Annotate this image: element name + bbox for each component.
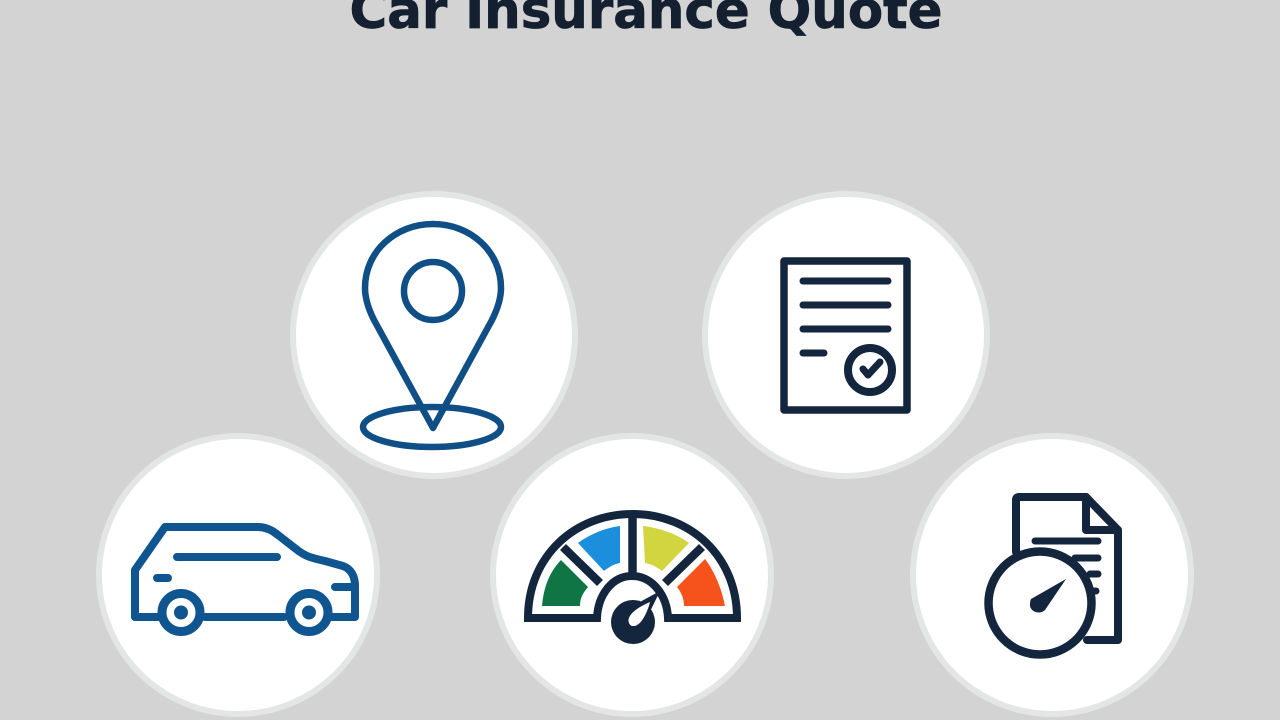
panel: location [293, 194, 575, 476]
icon: car [135, 527, 355, 632]
icon: location pin [363, 224, 501, 447]
panel: car [99, 436, 377, 714]
icon: document with stopwatch [988, 497, 1118, 654]
icon: document with check [784, 261, 907, 410]
icon: credit score gauge [528, 514, 737, 644]
gauge segment: yellow [643, 526, 689, 571]
gauge segment: blue [578, 526, 620, 571]
gauge segment: orange [677, 559, 725, 606]
gauge segment: green [542, 560, 588, 606]
gauge needle [611, 600, 655, 644]
panel: timed quote [913, 436, 1191, 714]
panel: policy document [705, 194, 987, 476]
panel: gauge [493, 436, 771, 714]
